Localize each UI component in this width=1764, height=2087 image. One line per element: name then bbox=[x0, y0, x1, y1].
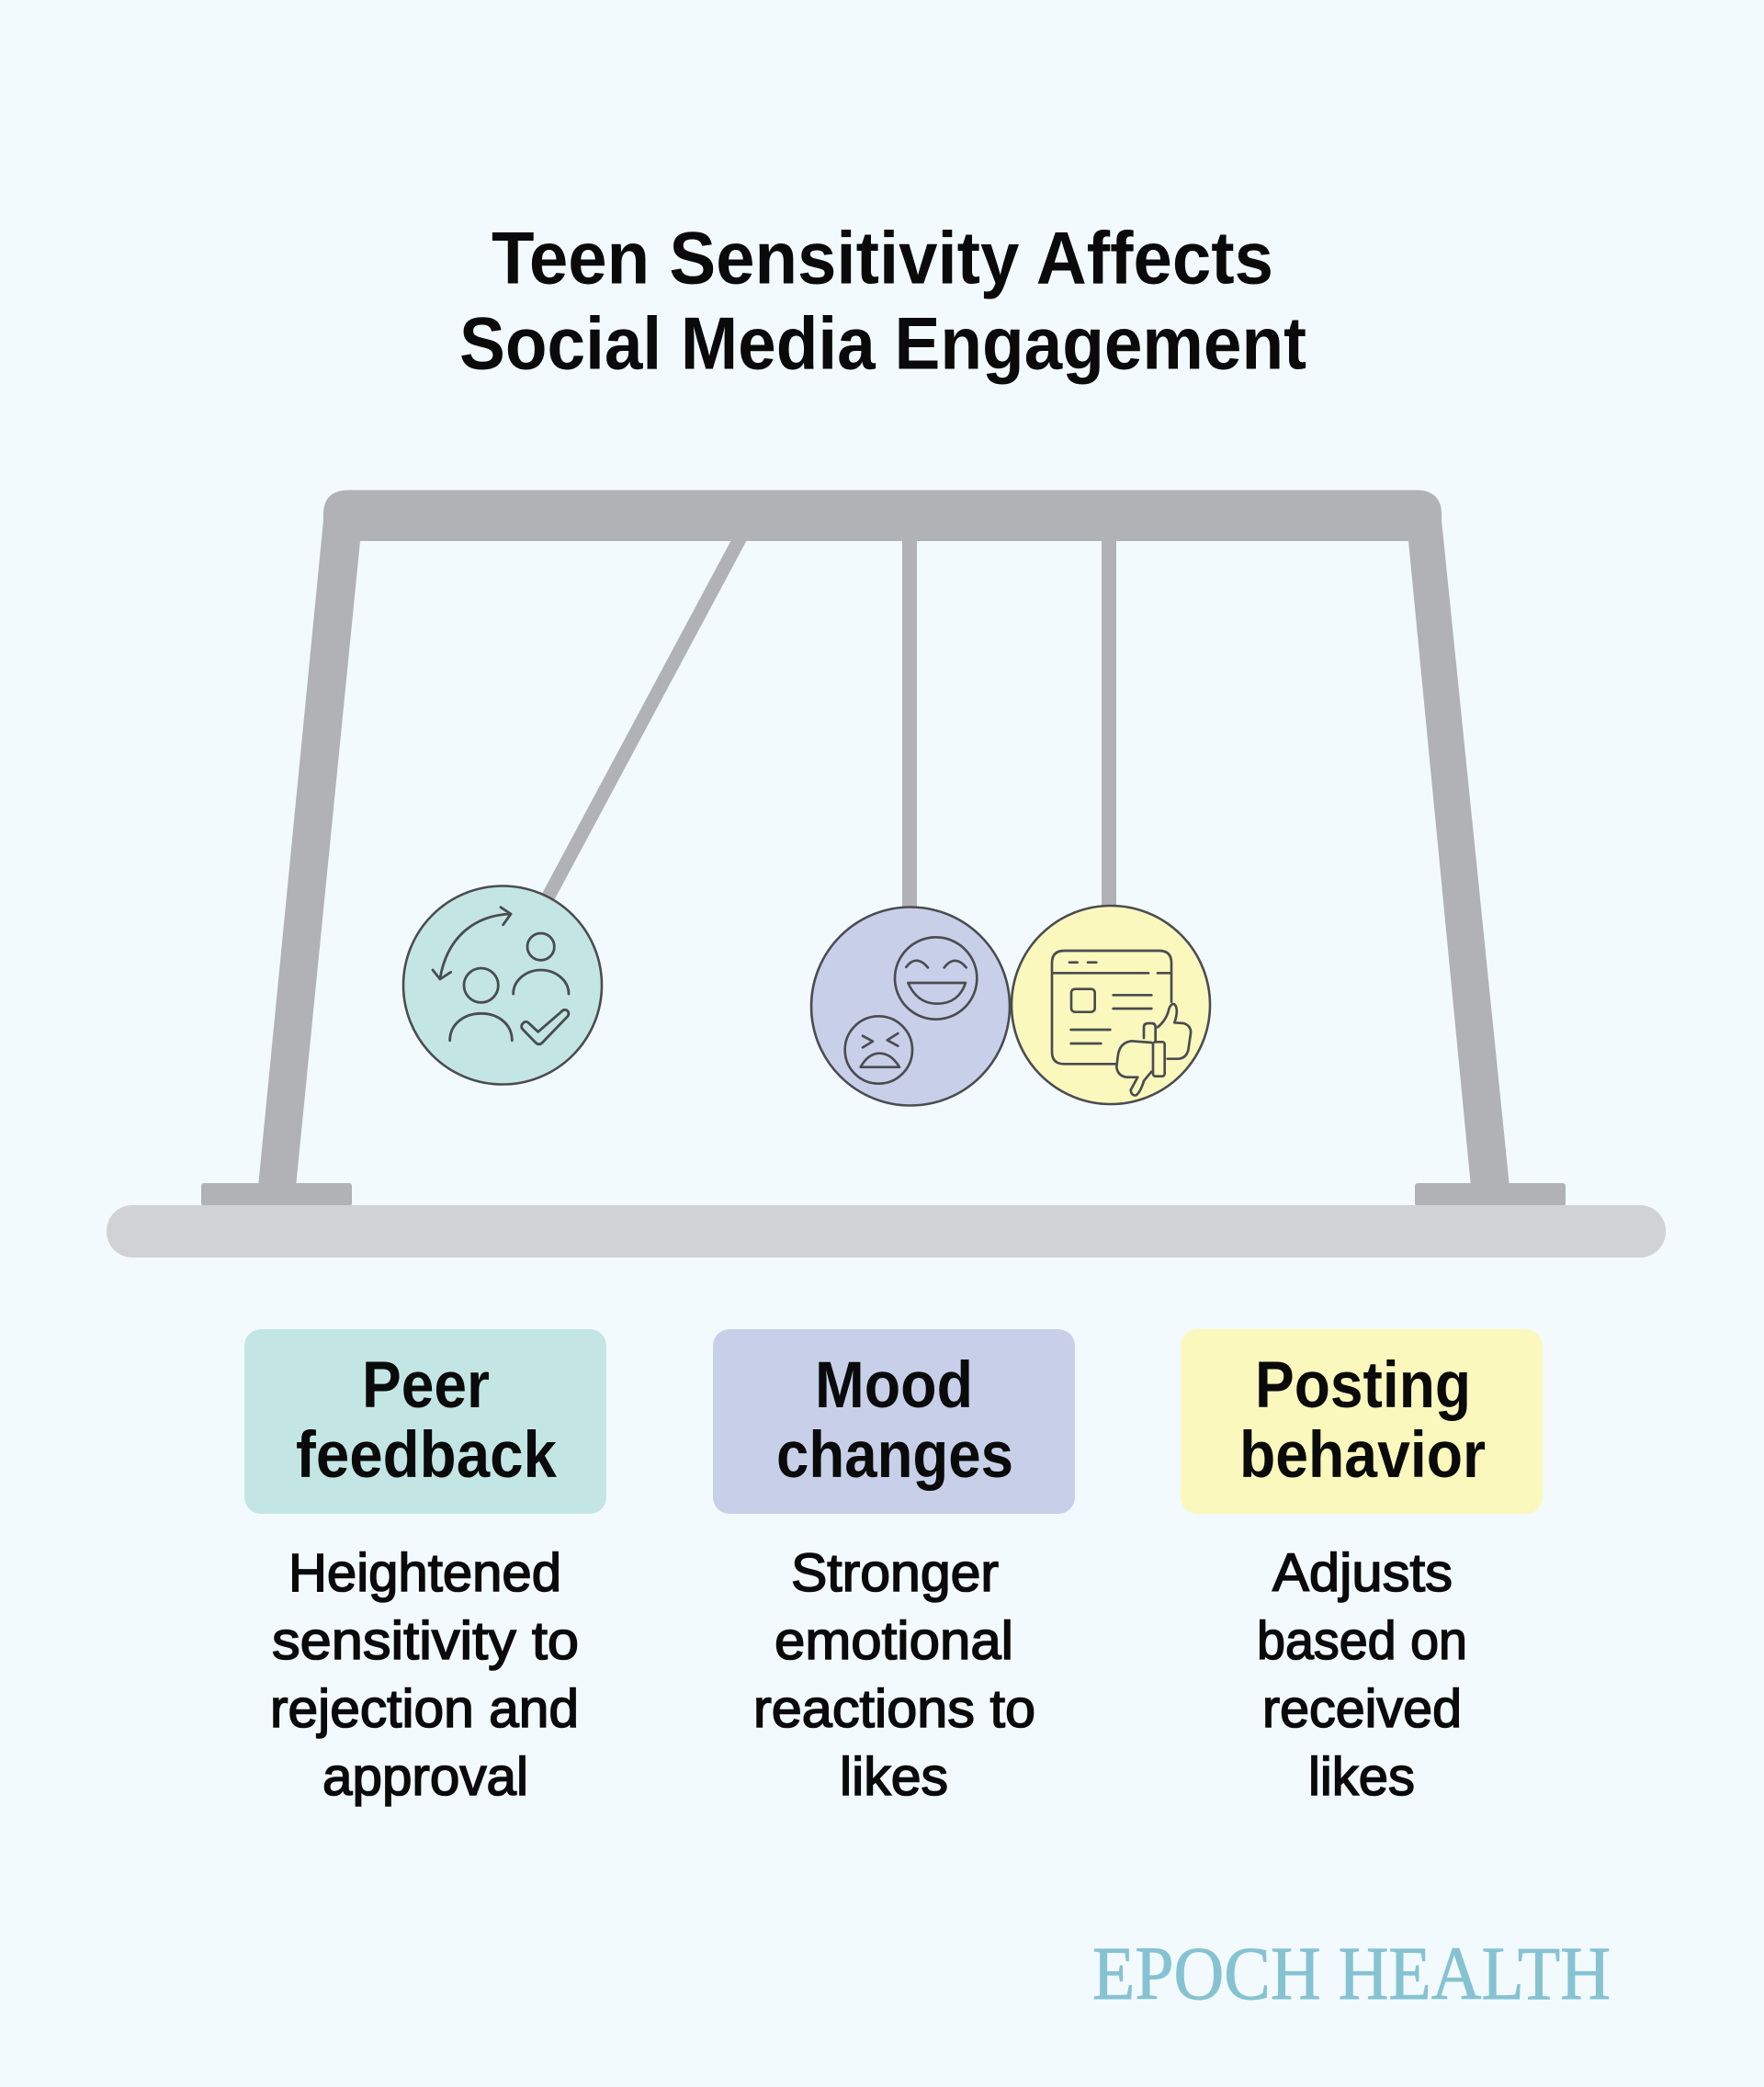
logo: Epoch Health: EPOCH HEALTH bbox=[1092, 1931, 1611, 2015]
cradle frame bbox=[201, 491, 1566, 1206]
text: peer feedback description: rejection and bbox=[270, 1679, 579, 1739]
label box: peer feedback: Peer bbox=[362, 1349, 490, 1422]
label box: posting behavior bbox=[1181, 1329, 1543, 1514]
label box: mood changes: Mood bbox=[815, 1349, 973, 1422]
pendulum strings bbox=[544, 537, 1116, 914]
label box: peer feedback: feedback bbox=[296, 1419, 557, 1492]
text: posting behavior description: received bbox=[1262, 1679, 1462, 1739]
label box: posting behavior: Posting bbox=[1255, 1349, 1471, 1422]
text: posting behavior description: Adjusts bbox=[1272, 1543, 1453, 1603]
label box: mood changes: changes bbox=[776, 1419, 1013, 1492]
base bar bbox=[107, 1205, 1666, 1258]
text: mood changes description bbox=[753, 1543, 1035, 1807]
text: mood changes description: Stronger bbox=[791, 1543, 999, 1603]
text: mood changes description: reactions to bbox=[753, 1679, 1035, 1739]
ball: mood faces icon bbox=[811, 908, 1010, 1106]
panel: posting behavior bbox=[1181, 1329, 1543, 1807]
label box: peer feedback bbox=[244, 1329, 606, 1514]
title: Social Media Engagement bbox=[459, 303, 1306, 386]
text: mood changes description: likes bbox=[840, 1747, 948, 1807]
title bbox=[459, 217, 1306, 386]
ball: peer feedback icon bbox=[403, 886, 602, 1084]
text: posting behavior description bbox=[1257, 1543, 1467, 1807]
label box: posting behavior: behavior bbox=[1239, 1419, 1486, 1492]
text: peer feedback description: Heightened bbox=[288, 1543, 561, 1603]
text: peer feedback description: sensitivity to bbox=[272, 1611, 579, 1671]
text: peer feedback description: approval bbox=[322, 1747, 528, 1807]
text: posting behavior description: likes bbox=[1308, 1747, 1415, 1807]
ball: posting behavior icon bbox=[1012, 906, 1210, 1104]
title: Teen Sensitivity Affects bbox=[492, 217, 1273, 299]
panel: peer feedback bbox=[244, 1329, 606, 1807]
label box: mood changes bbox=[713, 1329, 1075, 1514]
text: mood changes description: emotional bbox=[775, 1611, 1013, 1671]
panel: mood changes bbox=[713, 1329, 1075, 1807]
text: peer feedback description bbox=[270, 1543, 579, 1807]
text: posting behavior description: based on bbox=[1257, 1611, 1467, 1671]
